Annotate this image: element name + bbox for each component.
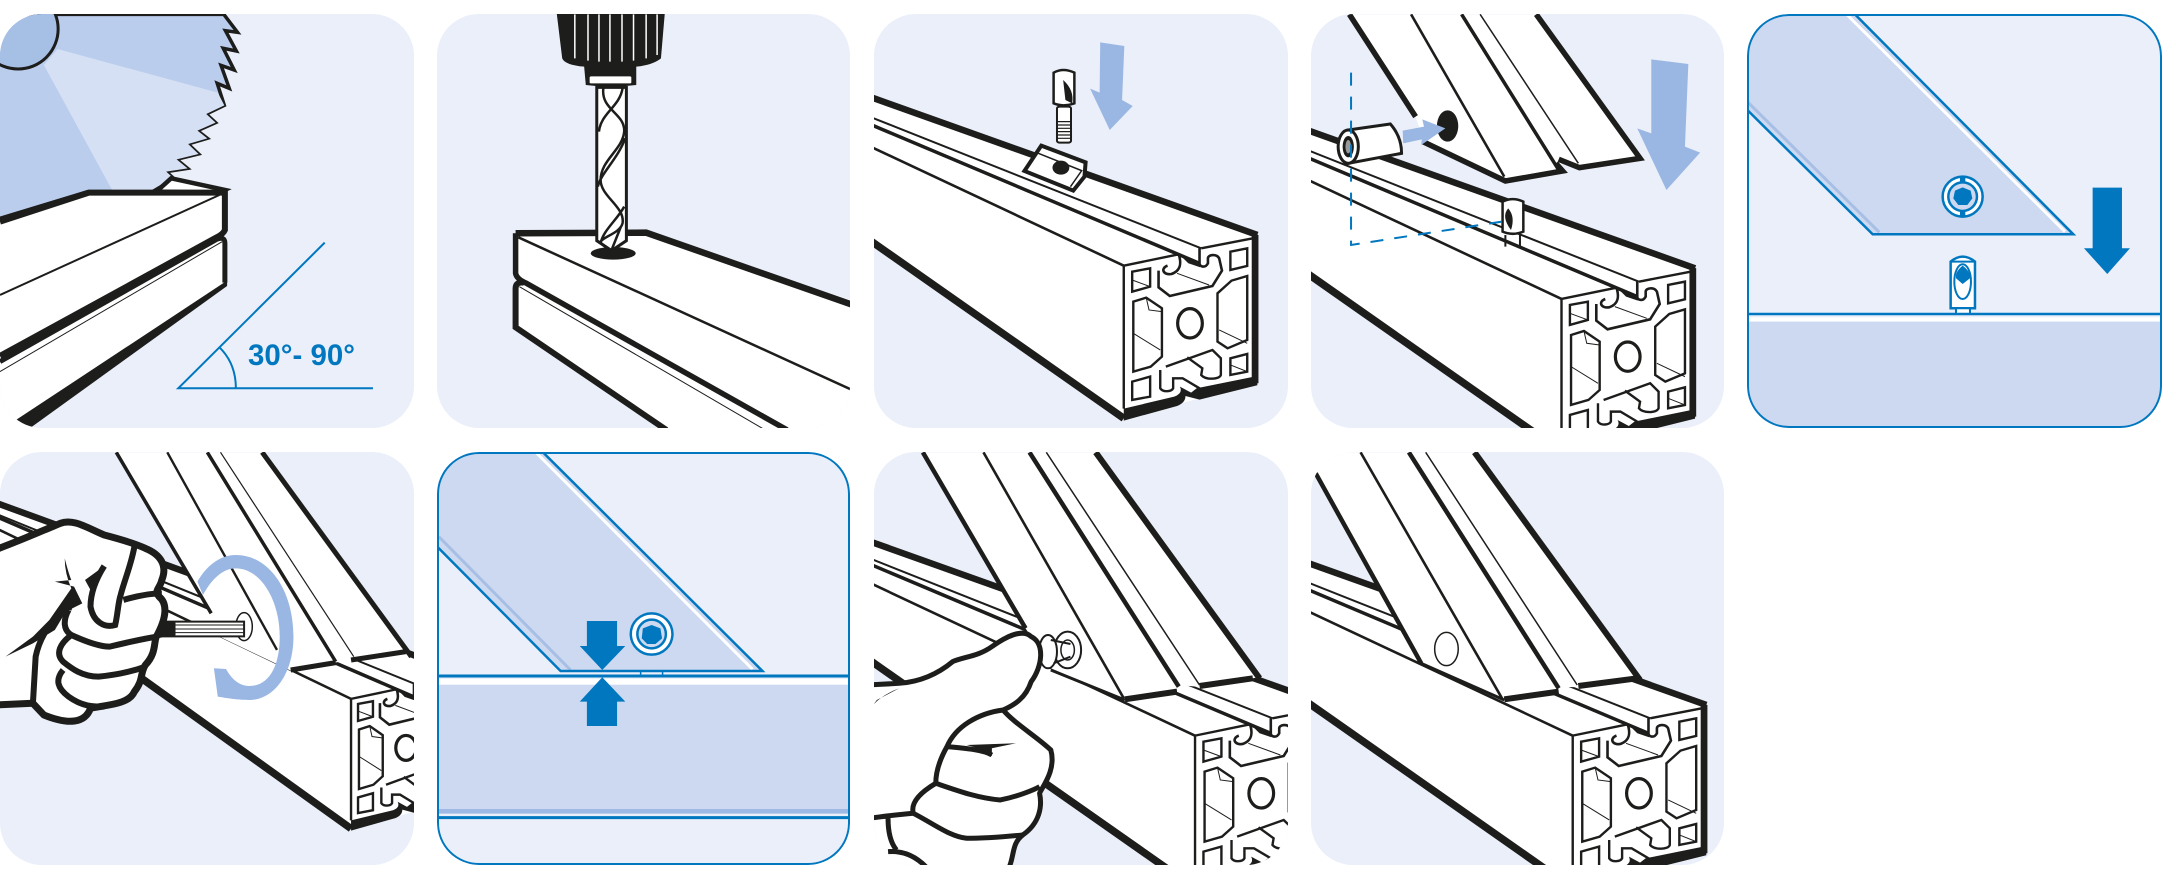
panel 1: saw cutting at an angle <box>0 0 414 430</box>
dashed alignment guide <box>1351 73 1508 245</box>
panel 7 border <box>438 453 849 864</box>
arrow: down <box>580 621 625 670</box>
panel 5: side view of strut above bolt <box>1747 14 2162 432</box>
panel 6: tightening with a hex key <box>0 452 414 865</box>
arrow: push connector into hole <box>1403 119 1445 145</box>
icon: slot nut <box>1024 146 1086 191</box>
stacked workpiece <box>0 178 227 430</box>
arrow: lower strut <box>1637 59 1700 190</box>
panel 5 border <box>1748 15 2161 427</box>
icon: hex key in connector <box>156 613 252 641</box>
icon: connector head <box>631 613 672 655</box>
panel 3: inserting the bolt and nut into the slot <box>874 14 1288 428</box>
panel 8: pressing the connector cap with thumb <box>763 452 1330 877</box>
aluminium profile <box>763 503 1330 877</box>
strut profile <box>923 452 1260 700</box>
icon: saw blade <box>0 0 238 220</box>
arrow: up <box>580 677 625 726</box>
base profile band <box>1747 314 2162 432</box>
angle label: 30°- 90° <box>248 339 355 372</box>
icon: closed cap <box>1435 632 1458 666</box>
aluminium profile <box>0 501 463 831</box>
icon: drill chuck and bit <box>557 13 665 251</box>
angle diagram <box>178 243 373 388</box>
base profile band <box>437 671 851 818</box>
arrow: insert downwards <box>1090 42 1133 130</box>
icon: connector cap <box>1039 632 1081 668</box>
icon: bolt front view <box>1951 257 1975 314</box>
workpiece block <box>516 233 856 430</box>
icon: bolt in slot <box>1503 199 1523 248</box>
aluminium profile <box>874 94 1258 422</box>
strut profile <box>1349 14 1640 182</box>
strut profile <box>1309 452 1640 700</box>
panel 7: side view with strut seated on base <box>437 452 851 865</box>
strut profile <box>116 452 411 671</box>
panel 9: finished connection with cap fitted <box>1141 452 1724 877</box>
icon: cylinder connector <box>1338 124 1402 163</box>
icon: connector head <box>1943 176 1983 218</box>
aluminium profile <box>1141 503 1707 877</box>
arrow: lower strut <box>2084 188 2130 274</box>
icon: bolt <box>1054 70 1074 143</box>
strut cross-section <box>1747 14 2074 234</box>
panel 4: mounting the strut on the aligned bolt <box>1311 14 1724 428</box>
arrow: rotation <box>197 555 293 700</box>
panel 2: drilling the profile <box>437 13 856 430</box>
aluminium profile <box>1311 128 1696 428</box>
icon: thumb and fist <box>868 633 1052 868</box>
icon: hand gripping key <box>0 522 165 721</box>
strut cross-section <box>437 452 762 671</box>
